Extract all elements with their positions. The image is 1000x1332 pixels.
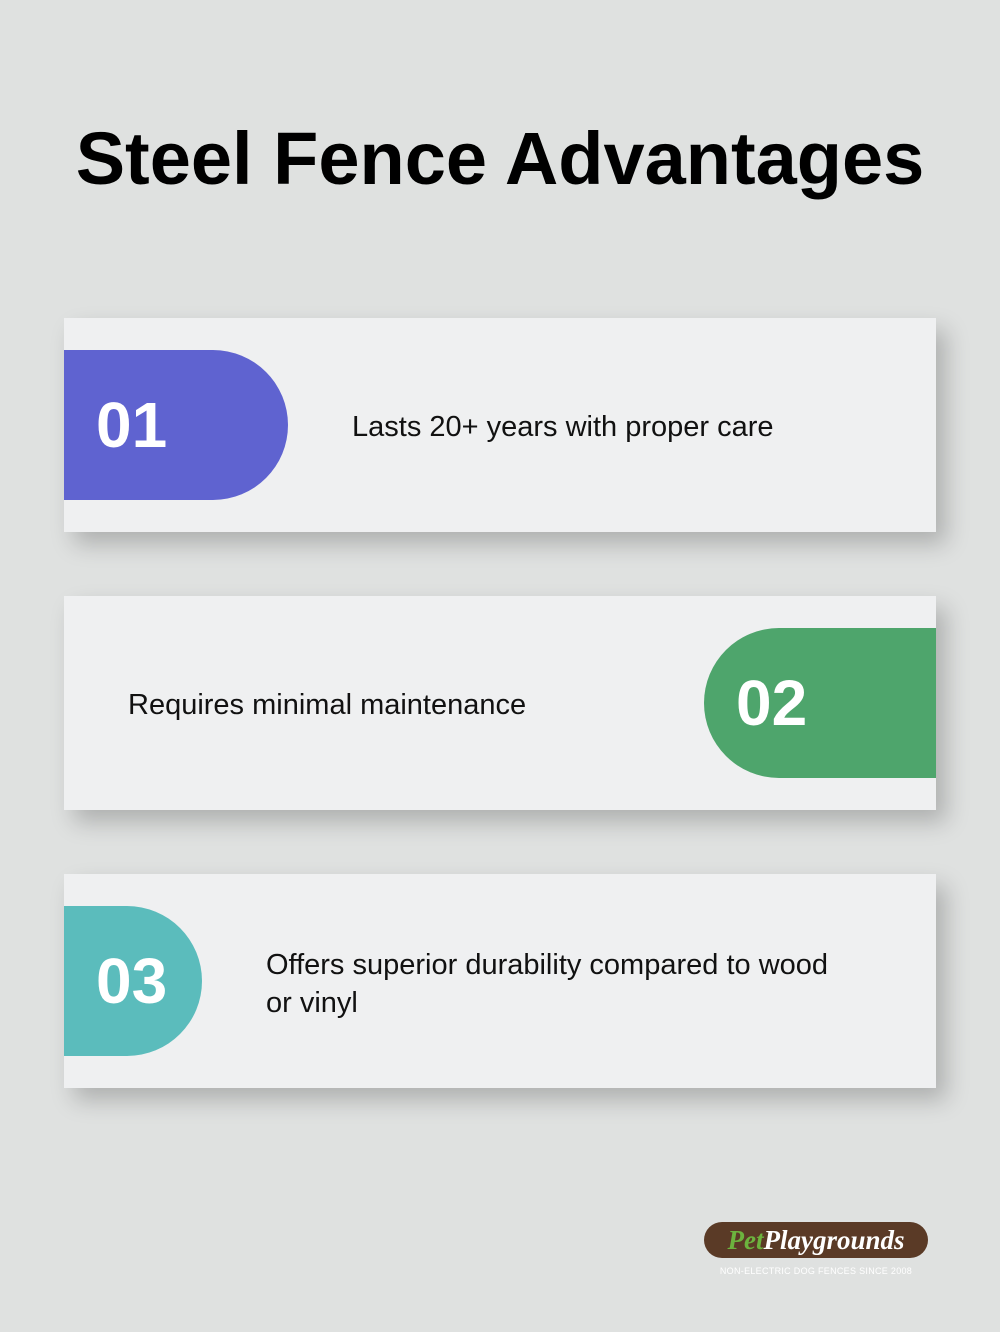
title: Steel Fence Advantages [76,117,924,200]
text 3: Offers superior durability compared to wood [266,949,828,981]
badge 02: 02 [736,667,807,739]
badge 03: 03 [96,945,167,1017]
logo [704,1222,928,1276]
logo: PetPlaygrounds [727,1225,904,1255]
card 3 [64,874,936,1088]
text 1: Lasts 20+ years with proper care [352,411,774,443]
logo: NON-ELECTRIC DOG FENCES SINCE 2008 [720,1266,912,1276]
badge 01: 01 [96,389,167,461]
badge 02 [704,628,936,778]
text 2: Requires minimal maintenance [128,689,526,721]
text 3: or vinyl [266,987,358,1019]
text 3 [266,949,828,1019]
card 2 [64,596,936,810]
badge 03 [64,906,202,1056]
badge 01 [64,350,288,500]
card 1 [64,318,936,532]
